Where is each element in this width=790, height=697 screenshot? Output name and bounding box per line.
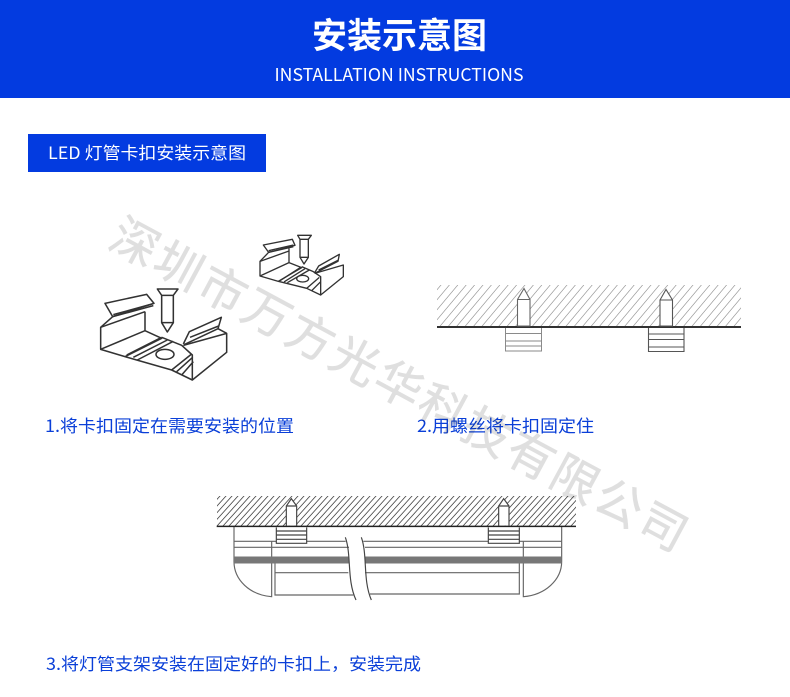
clip blocks [276, 527, 519, 543]
illustration: step 2 screws fixed in ceiling [437, 285, 741, 352]
cut marks [345, 537, 371, 600]
icon: clip section left [506, 328, 542, 351]
icon: screw right [660, 290, 672, 326]
icon: clip section right [648, 328, 684, 352]
step 2 caption: 2.用螺丝将卡扣固定住 [417, 412, 594, 437]
screws [286, 499, 509, 526]
illustration: step 1 clips and screws [101, 235, 343, 380]
title: 安装示意图 [312, 8, 487, 59]
illustration: step 3 tube mounted on clips [217, 496, 576, 600]
section heading tag: LED 灯管卡扣安装示意图 [48, 139, 246, 164]
step 3 caption: 3.将灯管支架安装在固定好的卡扣上，安装完成 [46, 650, 421, 675]
icon: small mounting clip [260, 235, 343, 295]
icon: small screw [298, 235, 311, 264]
watermark: 深圳市万方光华科技有限公司 [100, 198, 705, 566]
LED strip band [234, 549, 562, 570]
section heading tag [28, 134, 266, 172]
step 1 caption: 1.将卡扣固定在需要安装的位置 [45, 412, 294, 437]
subtitle: INSTALLATION INSTRUCTIONS [274, 61, 524, 87]
header band [0, 0, 790, 98]
hatched ceiling [437, 285, 741, 326]
icon: screw left [518, 288, 530, 326]
tube body lines [234, 527, 353, 597]
icon: large mounting clip [101, 289, 227, 380]
hatched ceiling [217, 496, 576, 526]
ceiling line [437, 326, 741, 328]
ceiling line [217, 524, 576, 529]
icon: large screw [157, 289, 178, 332]
